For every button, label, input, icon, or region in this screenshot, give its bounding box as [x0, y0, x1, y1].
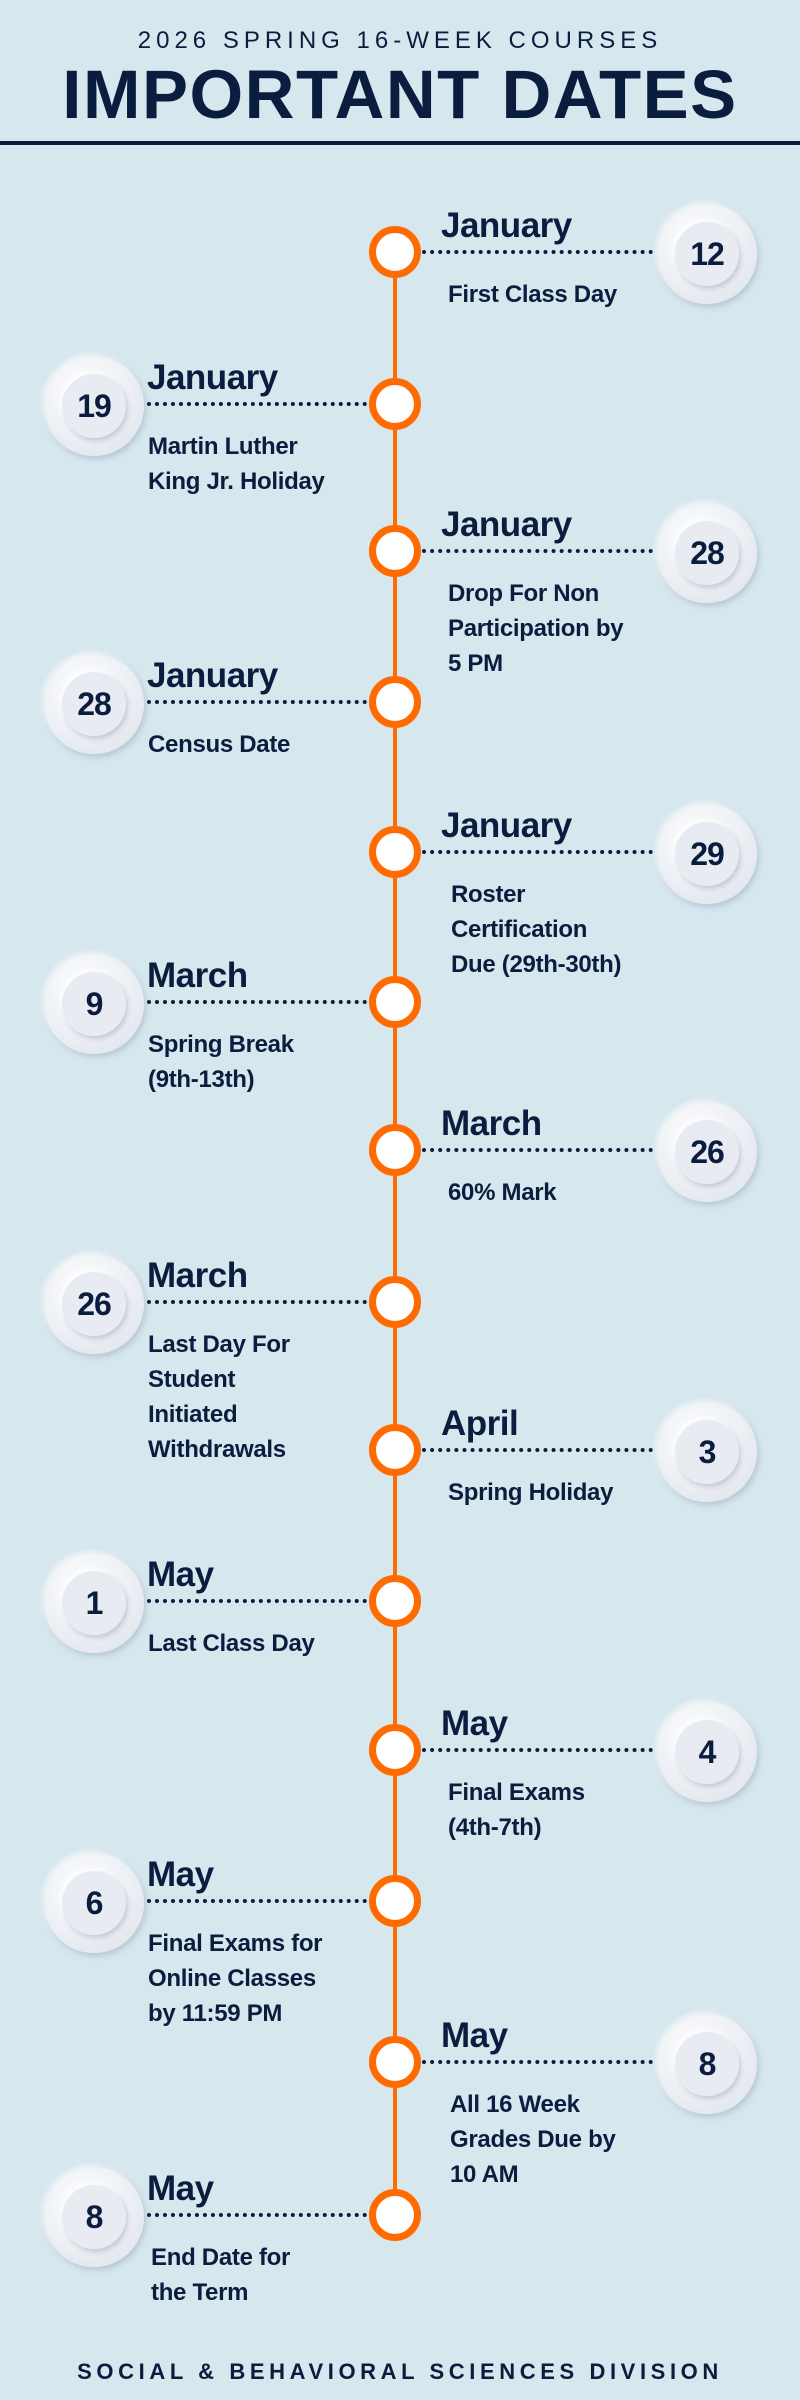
- item: Mar 26 withdrawals: Last Day For: [148, 1331, 290, 1358]
- item: May 6: [41, 1850, 367, 2027]
- item: Mar 26 60%: 26: [690, 1134, 724, 1170]
- item: Jan 28 census: 28: [77, 686, 111, 722]
- item: May 4: 4: [699, 1734, 715, 1770]
- title: IMPORTANT DATES: [62, 56, 738, 133]
- item: Mar 9: [41, 951, 367, 1093]
- item: May 8 end: May: [147, 2169, 214, 2208]
- item: Jan 12: First Class Day: [448, 281, 617, 308]
- item: Mar 26 withdrawals: 26: [77, 1286, 111, 1322]
- item: Jan 28 drop: Participation by: [448, 615, 623, 642]
- subtitle: 2026 SPRING 16-WEEK COURSES: [138, 27, 662, 54]
- item: Mar 9: March: [147, 956, 248, 995]
- item: May 4: (4th-7th): [448, 1814, 541, 1841]
- item: Mar 26 60%: 60% Mark: [448, 1179, 556, 1206]
- item: May 1: May: [147, 1555, 214, 1594]
- item: Jan 29: 29: [690, 836, 724, 872]
- item: Mar 26 withdrawals: Student: [148, 1366, 235, 1393]
- item: May 1: Last Class Day: [148, 1630, 315, 1657]
- item: Jan 12: January: [441, 206, 572, 245]
- item: Jan 29: Roster: [451, 881, 525, 908]
- text: Due (29th-30th): [451, 951, 621, 978]
- item: Mar 26 60%: [422, 1099, 761, 1207]
- item: Jan 28 census: [41, 651, 367, 759]
- item: May 8 grades: [422, 2011, 761, 2188]
- footer: SOCIAL & BEHAVIORAL SCIENCES DIVISION: [77, 2359, 723, 2384]
- item: Mar 9: 9: [86, 986, 102, 1022]
- item: Jan 12: 12: [690, 236, 724, 272]
- item: Jan 19: January: [147, 358, 278, 397]
- item: May 6: 6: [86, 1884, 102, 1920]
- item: Jan 19: 19: [77, 388, 111, 424]
- item: May 4: May: [441, 1704, 508, 1743]
- item: May 8 grades: May: [441, 2016, 508, 2055]
- item: Apr 3: Spring Holiday: [448, 1479, 613, 1506]
- item: Jan 19: Martin Luther: [148, 433, 297, 460]
- item: Apr 3: April: [441, 1404, 518, 1443]
- item: Mar 26 60%: March: [441, 1104, 542, 1143]
- item: Jan 19: [41, 353, 367, 495]
- item: Apr 3: 3: [699, 1434, 715, 1470]
- item: May 1: [41, 1550, 367, 1658]
- item: May 6: Final Exams for: [148, 1930, 322, 1957]
- item: May 4: Final Exams: [448, 1779, 585, 1806]
- item: May 6: Online Classes: [148, 1965, 316, 1992]
- item: Jan 28 census: January: [147, 656, 278, 695]
- item: Apr 3: [422, 1399, 761, 1507]
- item: May 8 grades: 8: [699, 2046, 715, 2082]
- item: May 1: 1: [86, 1584, 102, 1620]
- item: Mar 9: Spring Break: [148, 1031, 294, 1058]
- text: Withdrawals: [148, 1436, 286, 1463]
- item: May 8 end: 8: [86, 2198, 102, 2234]
- item: Jan 28 drop: January: [441, 505, 572, 544]
- item: May 8 grades: Grades Due by: [450, 2126, 616, 2153]
- item: Jan 28 drop: 28: [690, 534, 724, 570]
- item: May 8 grades: All 16 Week: [450, 2091, 580, 2118]
- text: by 11:59 PM: [148, 2000, 282, 2027]
- text: 5 PM: [448, 650, 503, 677]
- item: Jan 29: January: [441, 806, 572, 845]
- item: Jan 28 census: Census Date: [148, 731, 290, 758]
- item: May 8 end: the Term: [151, 2279, 248, 2306]
- timeline: [369, 226, 421, 2241]
- item: Jan 28 drop: Drop For Non: [448, 580, 599, 607]
- item: May 4: [422, 1699, 761, 1841]
- item: May 6: May: [147, 1855, 214, 1894]
- header rule: [0, 141, 800, 145]
- item: Jan 12: [422, 201, 761, 309]
- item: Mar 26 withdrawals: March: [147, 1256, 248, 1295]
- item: May 8 end: End Date for: [151, 2244, 290, 2271]
- item: Jan 29: [422, 801, 761, 978]
- item: May 8 end: [41, 2164, 367, 2306]
- item: Mar 26 withdrawals: [41, 1251, 367, 1463]
- text: Initiated: [148, 1401, 237, 1428]
- item: Mar 9: (9th-13th): [148, 1066, 254, 1093]
- item: Jan 28 drop: [422, 500, 761, 677]
- text: 10 AM: [450, 2161, 518, 2188]
- item: Jan 19: King Jr. Holiday: [148, 468, 325, 495]
- item: Jan 29: Certification: [451, 916, 587, 943]
